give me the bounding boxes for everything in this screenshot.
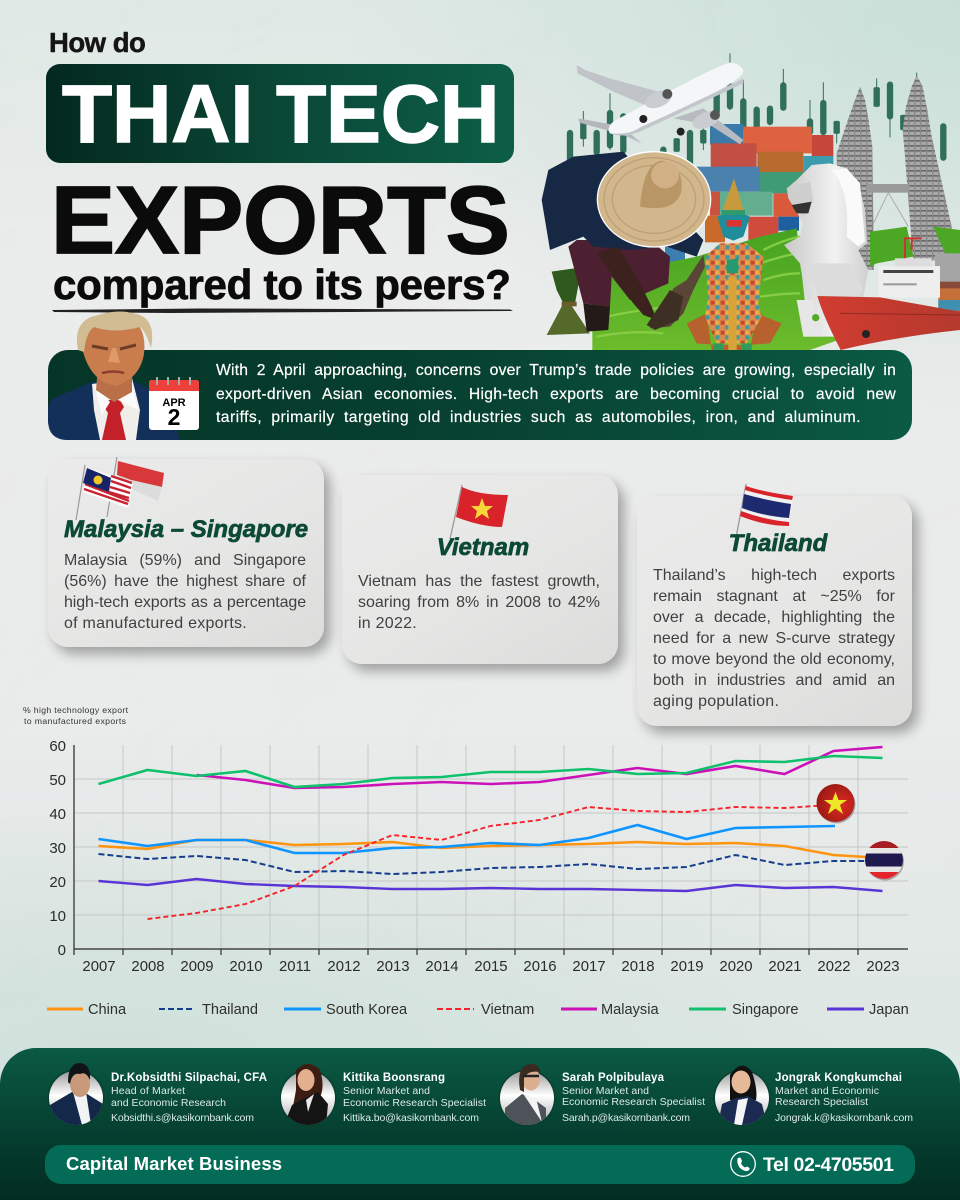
flags: Malaysia and Singapore	[76, 457, 164, 520]
x axis labels: 2008	[131, 959, 165, 975]
author: Sarah: Senior Market and	[562, 1085, 649, 1097]
y axis labels	[49, 738, 66, 959]
card text: Thailand: need for a new S-curve strategy	[653, 630, 895, 647]
x axis labels: 2009	[180, 959, 214, 975]
card text: Vietnam: Vietnam has the fastest growth,	[358, 573, 600, 590]
card title: Thailand: Thailand	[729, 530, 827, 557]
y axis labels: 30	[49, 840, 66, 857]
towers	[837, 75, 958, 270]
containers	[665, 124, 833, 263]
card text: Vietnam: soaring from 8% in 2008 to 42%	[358, 594, 600, 611]
flag: Thailand	[736, 484, 793, 534]
author: Sarah: Sarah Polpibulaya	[562, 1072, 665, 1084]
author: Kobsidthi: Head of Market	[111, 1085, 185, 1097]
rice bundle	[547, 268, 590, 335]
series: Thailand	[98, 854, 882, 874]
x axis labels: 2018	[621, 959, 655, 975]
card title: Malaysia - Singapore: Malaysia – Singapore	[64, 516, 308, 543]
candlesticks	[567, 53, 946, 167]
airplane	[577, 63, 743, 144]
author: Jongrak: Jongrak.k@kasikornbank.com	[775, 1112, 913, 1124]
contact: Capital Market Business: Capital Market Business	[66, 1153, 282, 1174]
heading: How do: How do	[49, 27, 145, 58]
legend	[47, 1002, 909, 1018]
legend: Singapore	[689, 1002, 799, 1018]
y axis labels: 10	[49, 908, 66, 925]
panel: Vietnam	[342, 475, 618, 664]
x axis labels: 2017	[572, 959, 606, 975]
author: Jongrak: Market and Economic	[775, 1085, 879, 1097]
ship	[817, 238, 960, 350]
author: Sarah	[498, 1064, 705, 1126]
legend: Japan	[827, 1002, 909, 1018]
x axis labels: 2011	[279, 959, 311, 975]
intro text: tariffs, primarily targeting old industries such as automobiles, iron, and aluminum.	[216, 409, 861, 426]
series: Japan	[98, 879, 882, 891]
legend: South Korea: South Korea	[326, 1002, 408, 1018]
x axis labels: 2022	[817, 959, 851, 975]
legend: Thailand	[159, 1002, 258, 1018]
flag: Vietnam	[449, 485, 508, 539]
author: Jongrak: Research Specialist	[775, 1096, 868, 1108]
card text: Vietnam	[358, 573, 600, 632]
contact bar	[45, 1145, 915, 1184]
author: Kittika: Economic Research Specialist	[343, 1097, 486, 1109]
merlion	[784, 163, 868, 337]
card text: Malaysia: Malaysia (59%) and Singapore	[64, 552, 306, 569]
card text: Thailand: Thailand’s high-tech exports	[653, 567, 895, 584]
chart: high tech exports line chart	[23, 705, 909, 1018]
series: Vietnam	[148, 805, 830, 919]
title: THAI TECH text: THAI TECH	[62, 69, 499, 160]
series: Singapore	[98, 756, 882, 787]
icon: calendar APR 2: 2	[168, 404, 180, 430]
guardian statue	[687, 178, 782, 350]
card text: Thailand: both in industries and amid an	[653, 672, 895, 689]
x axis labels: 2023	[866, 959, 900, 975]
author: Kobsidthi: Kobsidthi.s@kasikornbank.com	[111, 1112, 254, 1124]
portrait: Trump	[48, 312, 180, 440]
author: Sarah: Economic Research Specialist	[562, 1096, 705, 1108]
brush underline	[52, 308, 513, 313]
rice field	[592, 227, 960, 350]
x axis labels: 2013	[376, 959, 410, 975]
author: Kobsidthi	[48, 1063, 267, 1126]
axis title	[23, 705, 129, 726]
card text: Thailand	[653, 567, 895, 710]
legend: Thailand: Thailand	[202, 1002, 258, 1018]
y axis labels: 0	[58, 942, 66, 959]
legend: Malaysia	[561, 1002, 659, 1018]
author: Jongrak	[714, 1066, 913, 1126]
y axis labels: 50	[49, 772, 66, 789]
y axis labels: 40	[49, 806, 66, 823]
author: Kittika: Kittika.bo@kasikornbank.com	[343, 1112, 479, 1124]
card text: Thailand: remain stagnant at ~25% for	[653, 588, 895, 605]
card text: Malaysia: (56%) have the highest share of	[64, 573, 306, 590]
panel: Malaysia - Singapore	[48, 459, 324, 647]
x axis labels: 2016	[523, 959, 557, 975]
legend: Japan: Japan	[869, 1002, 909, 1018]
author: Kittika: Senior Market and	[343, 1085, 430, 1097]
author: Kobsidthi: Dr.Kobsidthi Silpachai, CFA	[111, 1072, 267, 1084]
card text: Thailand: aging population.	[653, 693, 779, 710]
legend: Malaysia: Malaysia	[601, 1002, 659, 1018]
icon: calendar APR 2: APR	[162, 397, 186, 409]
card text: Thailand: over a decade, highlighting the	[653, 609, 895, 626]
x axis labels: 2021	[768, 959, 802, 975]
series: Malaysia	[196, 747, 882, 788]
intro text: export-driven Asian economies. High-tech exports are becoming crucial to avoid new	[216, 386, 896, 403]
title: EXPORTS: EXPORTS	[51, 167, 510, 274]
icon: calendar APR 2	[149, 377, 199, 430]
legend: Vietnam	[437, 1002, 534, 1018]
x axis labels	[82, 959, 900, 975]
axis title: to manufactured exports	[24, 716, 127, 726]
footer panel	[0, 1048, 960, 1200]
contact: telephone: Tel 02-4705501	[763, 1154, 894, 1176]
legend: South Korea	[284, 1002, 408, 1018]
axis title: % high technology export	[23, 705, 129, 715]
x axis labels: 2010	[229, 959, 263, 975]
title: compared to its peers: compared to its peers?	[53, 261, 511, 308]
card text: Thailand: to move beyond the old economy,	[653, 651, 895, 668]
x axis labels: 2015	[474, 959, 508, 975]
intro text: With 2 April approaching, concerns over Trump’s trade policies are growing, especially in	[216, 362, 896, 379]
x axis labels: 2019	[670, 959, 704, 975]
legend: China: China	[88, 1002, 127, 1018]
x axis labels: 2012	[327, 959, 361, 975]
title banner: THAI TECH	[46, 64, 514, 163]
marker: Thailand flag	[865, 841, 904, 880]
y axis labels: 20	[49, 874, 66, 891]
series: China	[98, 840, 882, 858]
card text: Malaysia: high-tech exports as a percentage	[64, 594, 306, 611]
intro text	[216, 362, 896, 426]
intro banner	[48, 350, 912, 440]
hero illustration: plane, containers, farmer, guardian, merlion, towers, ship	[542, 53, 960, 350]
y axis labels: 60	[49, 738, 66, 755]
card text: Vietnam: in 2022.	[358, 615, 417, 632]
panel: Thailand	[637, 496, 912, 726]
author: Sarah: Sarah.p@kasikornbank.com	[562, 1112, 690, 1124]
x axis labels: 2007	[82, 959, 116, 975]
x axis labels: 2014	[425, 959, 459, 975]
legend: Vietnam: Vietnam	[481, 1002, 534, 1018]
author: Kittika	[280, 1064, 486, 1126]
card text: Malaysia: of manufactured exports.	[64, 615, 247, 632]
author: Kittika: Kittika Boonsrang	[343, 1072, 445, 1084]
author: Kobsidthi: and Economic Research	[111, 1097, 226, 1109]
farmer	[542, 151, 711, 332]
card text: Malaysia	[64, 552, 306, 632]
card title: Vietnam: Vietnam	[437, 534, 529, 561]
author: Jongrak: Jongrak Kongkumchai	[775, 1072, 902, 1084]
marker: Vietnam flag	[816, 784, 856, 824]
legend: China	[47, 1002, 127, 1018]
icon: phone	[731, 1152, 755, 1176]
x axis labels: 2020	[719, 959, 753, 975]
series: South Korea	[98, 825, 835, 853]
legend: Singapore: Singapore	[732, 1002, 799, 1018]
